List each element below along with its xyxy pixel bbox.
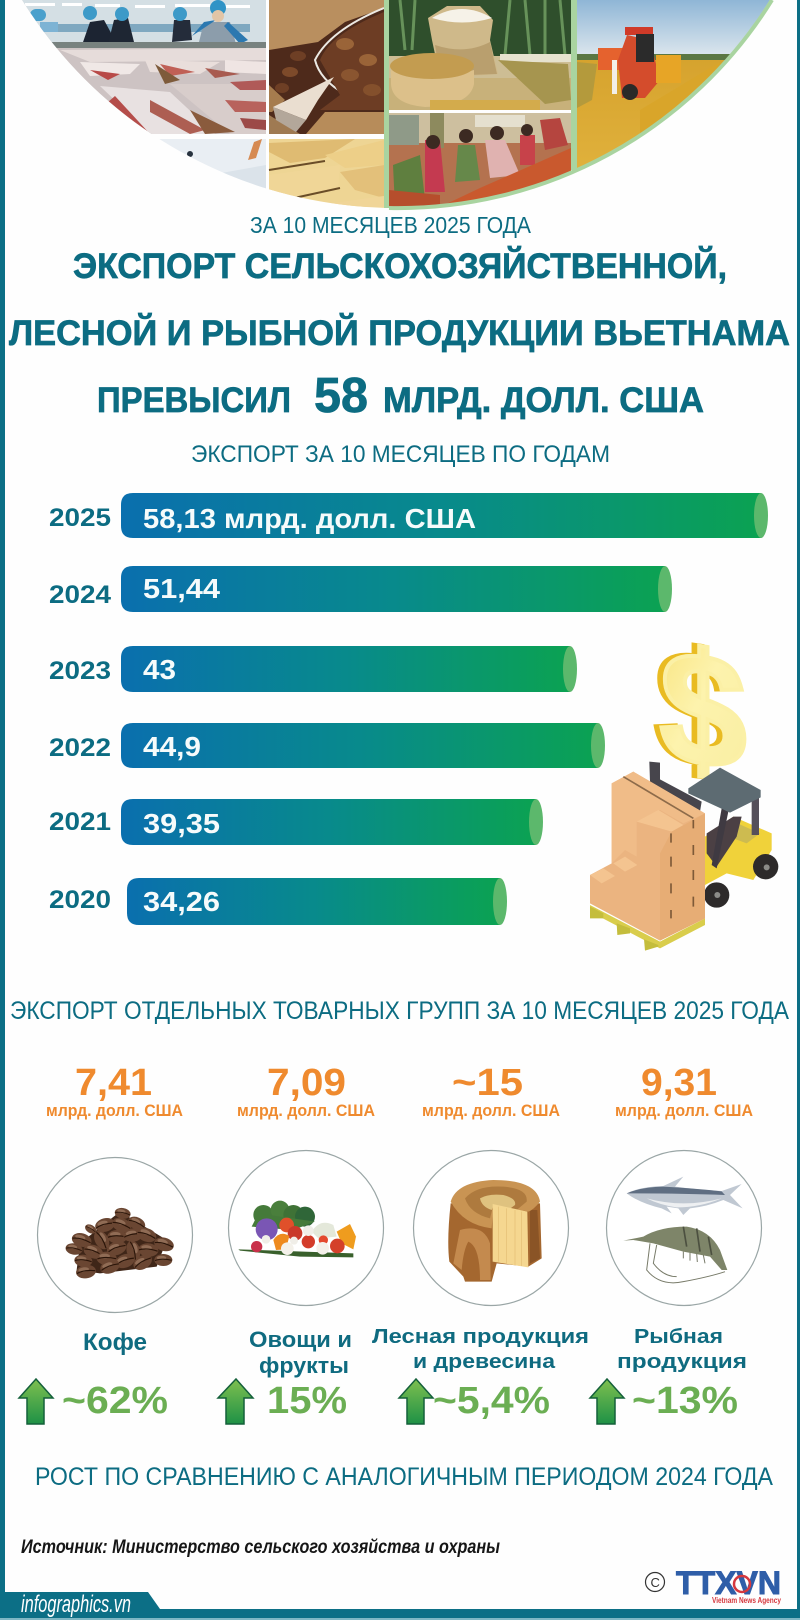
logo: TTXVN [646,1565,781,1605]
value: vegetables: млрд. долл. США [237,1101,375,1120]
title: ЭКСПОРТ СЕЛЬСКОХОЗЯЙСТВЕННОЙ, [73,246,727,286]
photo: sand and pangasius fragment [160,139,266,188]
bar 2021: 39,35 [143,808,220,839]
logo: TTXVN: TTXVN [676,1565,781,1601]
logo: TTXVN: Vietnam News Agency [712,1596,781,1605]
label: vegetables [249,1327,352,1378]
bar chart: export by year [49,493,768,925]
bar 2024: 51,44 [143,573,220,604]
chart heading: ЭКСПОРТ ЗА 10 МЕСЯЦЕВ ПО ГОДАМ [191,441,610,468]
value: fish: млрд. долл. США [615,1101,753,1120]
footer band [0,1591,800,1620]
growth: coffee [19,1379,168,1424]
title: МЛРД. ДОЛЛ. США [383,381,704,420]
title: ЛЕСНОЙ И РЫБНОЙ ПРОДУКЦИИ ВЬЕТНАМА [9,313,790,353]
value: vegetables [237,1062,375,1120]
source: Источник: Министерство сельского хозяйства и охраны [21,1537,500,1558]
photo: wooden planks [269,139,384,209]
growth: vegetables [218,1379,347,1424]
bar 2025 [49,493,768,538]
value: coffee [46,1062,183,1120]
value: forest: млрд. долл. США [422,1101,560,1120]
bar 2021: 2021 [49,808,111,836]
bar 2023: 2023 [49,657,111,685]
growth: vegetables: 15% [267,1380,347,1422]
label: fish [617,1326,747,1373]
bar 2020: 34,26 [143,886,220,917]
bar 2022 [49,723,605,768]
photo: people sorting fruit [389,113,571,207]
icon: gold dollar: $ [654,614,741,805]
label: fish: Рыбная [634,1326,723,1348]
circle icon: wood stump [414,1150,568,1306]
bar 2024 [49,566,672,612]
title [9,246,790,423]
bar 2022: 44,9 [143,731,201,762]
bar 2023: 43 [143,654,176,685]
icon: gold dollar: $ [659,615,747,806]
circle icon: coffee beans [38,1158,192,1312]
growth: fish: ~13% [632,1380,738,1422]
photo: rice harvester [577,0,777,170]
icon: forklift with dollar sign [590,614,778,951]
photo collage: semicircle [10,0,777,209]
bar 2020 [49,878,507,925]
label: fish: продукция [617,1351,747,1373]
label: forest [372,1326,589,1373]
label: vegetables: Овощи и [249,1327,352,1352]
label: coffee: Кофе [83,1329,147,1356]
title: ПРЕВЫСИЛ [97,381,291,420]
forklift body [649,762,778,908]
item: vegetables and fruits [218,1062,384,1424]
bar 2025: 58,13 млрд. долл. США [143,503,476,534]
item: forest products [372,1062,589,1424]
label: forest: Лесная продукция [372,1326,589,1348]
value: forest: ~15 [452,1062,523,1104]
bar 2025: 2025 [49,504,111,532]
bar 2023 [49,646,577,692]
growth: forest [399,1379,550,1424]
subtitle: ЗА 10 МЕСЯЦЕВ 2025 ГОДА [250,212,532,238]
value: coffee: млрд. долл. США [46,1101,183,1120]
value: fish: 9,31 [641,1062,717,1104]
value: forest [422,1062,560,1120]
photo dividers [384,0,577,208]
value: vegetables: 7,09 [267,1062,346,1104]
value: coffee: 7,41 [75,1062,152,1104]
bar 2021 [49,799,543,845]
bar 2024: 2024 [49,581,111,609]
growth: forest: ~5,4% [433,1380,550,1422]
item: fish products [590,1062,762,1424]
circle icon: fish and shrimp [606,1150,762,1306]
value: fish [615,1062,753,1120]
photo: fish processing workers [10,0,266,134]
growth: fish [590,1379,738,1424]
photo: coffee beans in scoop [269,0,384,134]
logo: TTXVN: C [650,1575,660,1590]
title: 58 [314,369,368,423]
label: forest: и древесина [413,1351,556,1373]
item: coffee [19,1062,192,1424]
bar 2020: 2020 [49,886,111,914]
photo: rice sack and bowl [389,0,571,110]
circle icon: vegetables [228,1150,384,1306]
growth: coffee: ~62% [62,1380,168,1422]
bar 2022: 2022 [49,734,111,762]
pallet with boxes [590,772,705,951]
collage ring [389,0,772,208]
footer site: infographics.vn [21,1591,131,1618]
label: vegetables: фрукты [259,1353,349,1378]
